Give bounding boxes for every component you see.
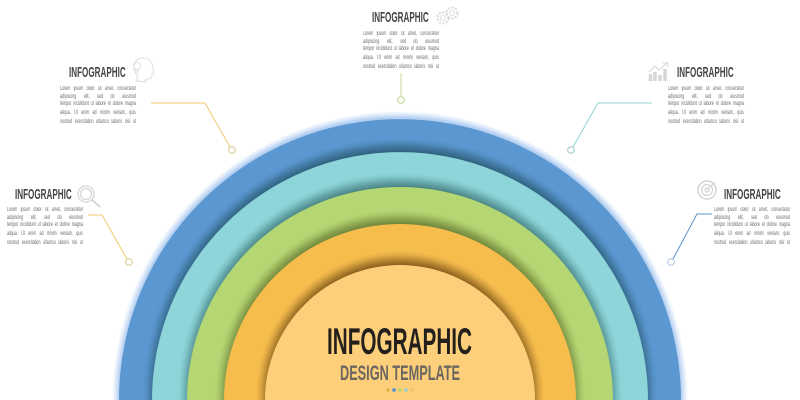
body text: tempor incididunt ut labore et dolore magna	[668, 100, 744, 106]
connector line	[88, 215, 127, 259]
body text: adipiscing elit, sed do eiusmod	[60, 94, 136, 100]
body text: adipiscing elit, sed do eiusmod	[7, 214, 83, 220]
connector line	[400, 73, 402, 96]
body text	[714, 206, 790, 246]
subtitle: DESIGN TEMPLATE	[340, 362, 460, 385]
connector dot	[668, 259, 674, 265]
outer glow	[110, 110, 690, 400]
body text	[7, 206, 83, 246]
main title: INFOGRAPHIC	[327, 321, 472, 362]
callout: target, right	[667, 180, 790, 266]
ring: orange	[224, 224, 576, 400]
shadow on orange ring	[249, 249, 551, 400]
body text: tempor incididunt ut labore et dolore magna	[714, 222, 790, 228]
ring: green	[187, 187, 613, 400]
callout: head idea, upper left	[60, 58, 236, 154]
center semicircle	[265, 265, 535, 400]
body text	[363, 30, 439, 70]
icon: bar chart with arrow	[649, 63, 668, 81]
body text: tempor incididunt ut labore et dolore magna	[7, 222, 83, 228]
body text: nostrud exercitation ullamco laboris nisi ut	[60, 118, 136, 124]
body text: Lorem ipsum dolor sit amet, consectetur	[668, 86, 744, 92]
connector line	[673, 214, 712, 259]
connector and icon layer	[567, 62, 668, 154]
body text: Lorem ipsum dolor sit amet, consectetur	[714, 206, 790, 212]
body text: aliqua. Ut enim ad minim veniam, quis	[7, 230, 83, 236]
shadow on green ring	[208, 208, 592, 400]
body text: nostrud exercitation ullamco laboris nisi ut	[668, 118, 744, 124]
connector and icon layer	[133, 58, 236, 154]
shadow on teal ring	[171, 171, 629, 400]
body text: nostrud exercitation ullamco laboris nisi ut	[7, 240, 83, 246]
heading: INFOGRAPHIC	[69, 64, 126, 81]
body text: adipiscing elit, sed do eiusmod	[714, 214, 790, 220]
heading: INFOGRAPHIC	[15, 186, 72, 203]
callout: search, left	[7, 185, 133, 266]
body text: Lorem ipsum dolor sit amet, consectetur	[60, 86, 136, 92]
shadow on blue ring	[136, 136, 664, 400]
body text: Lorem ipsum dolor sit amet, consectetur	[7, 206, 83, 212]
body text	[668, 86, 744, 124]
callout: chart, upper right	[567, 62, 744, 154]
ring: teal	[152, 152, 648, 400]
connector dot	[568, 147, 574, 153]
icon: magnifier	[78, 186, 100, 207]
callout: gears, top	[363, 6, 458, 104]
body text: nostrud exercitation ullamco laboris nisi ut	[714, 240, 790, 246]
heading: INFOGRAPHIC	[677, 64, 734, 81]
icon: head with bulb	[134, 58, 154, 82]
body text: aliqua. Ut enim ad minim veniam, quis	[668, 110, 744, 116]
pagination dots	[386, 388, 414, 392]
body text: adipiscing elit, sed do eiusmod	[363, 38, 439, 44]
heading: INFOGRAPHIC	[372, 9, 429, 26]
connector line	[151, 103, 230, 147]
body text: aliqua. Ut enim ad minim veniam, quis	[60, 110, 136, 116]
connector and icon layer	[77, 185, 133, 266]
icon: target	[698, 181, 716, 199]
body text: aliqua. Ut enim ad minim veniam, quis	[363, 54, 439, 60]
connector line	[573, 103, 652, 147]
connector dot	[229, 147, 235, 153]
body text: Lorem ipsum dolor sit amet, consectetur	[363, 30, 439, 36]
icon: gears	[438, 8, 458, 24]
body text: nostrud exercitation ullamco laboris nisi ut	[363, 64, 439, 70]
connector and icon layer	[397, 6, 458, 104]
body text: aliqua. Ut enim ad minim veniam, quis	[714, 230, 790, 236]
connector and icon layer	[667, 180, 717, 266]
body text: tempor incididunt ut labore et dolore magna	[60, 100, 136, 106]
ring: blue	[119, 119, 681, 400]
body text: tempor incididunt ut labore et dolore magna	[363, 46, 439, 52]
body text	[60, 86, 136, 124]
body text: adipiscing elit, sed do eiusmod	[668, 94, 744, 100]
connector dot	[126, 259, 132, 265]
heading: INFOGRAPHIC	[724, 186, 781, 203]
connector dot	[398, 97, 404, 103]
